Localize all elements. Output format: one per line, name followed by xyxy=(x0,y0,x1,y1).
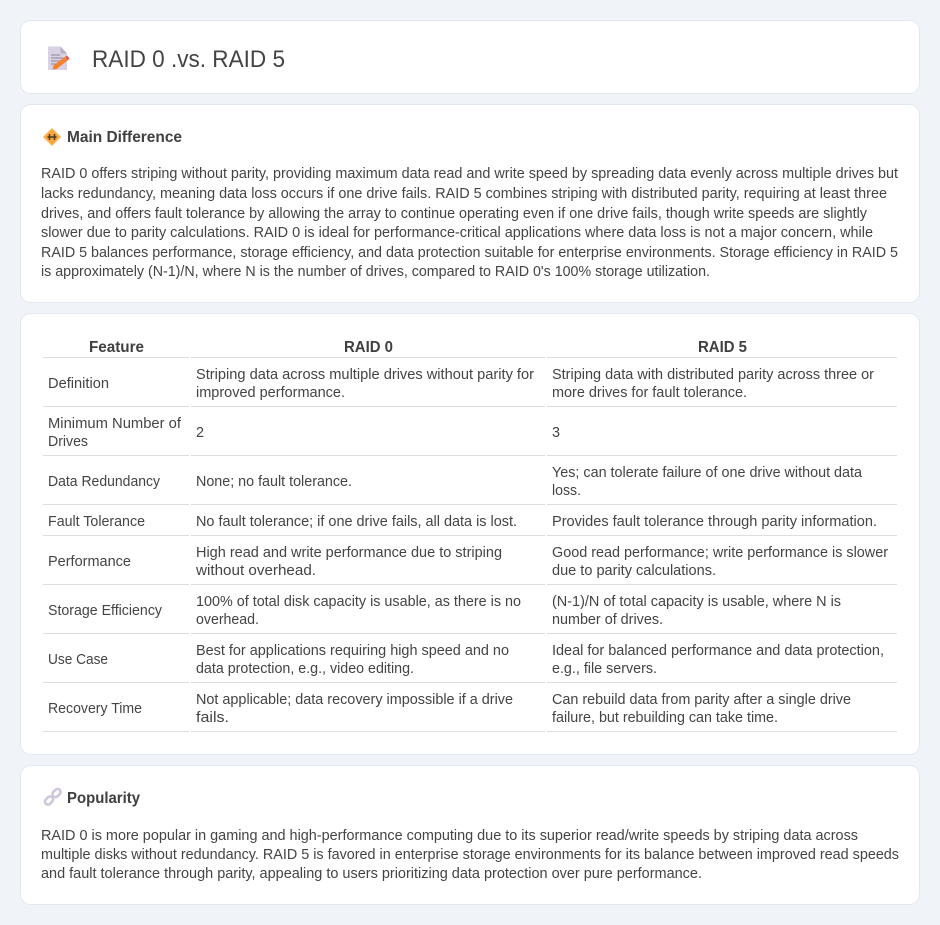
row: data redundancy xyxy=(48,465,862,499)
icon: chain link xyxy=(44,788,62,806)
row: use case: Ideal for balanced performance and data protection, xyxy=(552,643,884,659)
row: storage efficiency: overhead. xyxy=(196,612,259,628)
panel: main difference xyxy=(20,104,920,302)
row: use case xyxy=(48,643,884,677)
row: definition: Striping data across multiple drives without parity for xyxy=(196,367,534,383)
row: definition: Striping data with distributed parity across three or xyxy=(552,367,874,383)
row: fault tolerance: No fault tolerance; if one drive fails, all data is lost. xyxy=(196,514,517,530)
row: data redundancy: None; no fault tolerance. xyxy=(196,474,352,490)
text block: main difference paragraph: RAID 5 balances performance, storage efficiency, and data protection suitable for enterprise environments. Storage efficiency in RAID 5 xyxy=(41,245,898,261)
heading: main difference: Main Difference xyxy=(67,129,182,146)
heading: popularity: Popularity xyxy=(67,790,140,807)
row: recovery time: failure, but rebuilding can take time. xyxy=(552,710,778,726)
row: storage efficiency xyxy=(48,594,841,628)
text block: popularity paragraph: multiple disks without redundancy. RAID 5 is favored in enterprise storage environments for its balance between improved read speeds xyxy=(41,847,899,863)
row: minimum number of drives: Drives xyxy=(48,434,88,450)
row: definition: improved performance. xyxy=(196,385,345,401)
text block: main difference paragraph: slower due to parity calculations. RAID 0 is ideal for performance-critical applications where data loss is not a major concern, while xyxy=(41,225,873,241)
text block: main difference paragraph xyxy=(41,166,898,280)
row: performance xyxy=(48,545,888,579)
row: recovery time: fails. xyxy=(196,710,229,726)
row: recovery time xyxy=(48,692,851,726)
text block: popularity paragraph xyxy=(41,828,899,882)
row: storage efficiency: Storage Efficiency xyxy=(48,603,163,619)
table header row: RAID 5 xyxy=(698,339,747,356)
text block: popularity paragraph: and fault tolerance through parity, appealing to users prioritizing data protection over pure performance. xyxy=(41,866,702,882)
row: performance: due to parity calculations. xyxy=(552,563,716,579)
row: data redundancy: loss. xyxy=(552,483,581,499)
row: minimum number of drives: 2 xyxy=(196,425,204,441)
row: recovery time: Not applicable; data recovery impossible if a drive xyxy=(196,692,513,708)
row: storage efficiency: (N-1)/N of total capacity is usable, where N is xyxy=(552,594,841,610)
row: performance: High read and write performance due to striping xyxy=(196,545,502,561)
icon: document with pencil xyxy=(48,46,70,70)
table header row xyxy=(89,339,747,356)
text block: popularity paragraph: RAID 0 is more popular in gaming and high-performance computing due to its superior read/write speeds by striping data across xyxy=(41,828,858,844)
icon: warning diamond xyxy=(44,128,60,146)
row: recovery time: Can rebuild data from parity after a single drive xyxy=(552,692,851,708)
text block: main difference paragraph: drives, and offers fault tolerance by allowing the array to continue operating even if one drive fails, though write speeds are slightly xyxy=(41,206,868,222)
row: definition xyxy=(48,367,874,401)
row: storage efficiency: number of drives. xyxy=(552,612,663,628)
row: performance: Performance xyxy=(48,554,131,570)
row: fault tolerance: Provides fault tolerance through parity information. xyxy=(552,514,877,530)
panel: title header xyxy=(20,20,920,94)
row: minimum number of drives: 3 xyxy=(552,425,560,441)
row: fault tolerance xyxy=(48,514,877,530)
row: performance: Good read performance; write performance is slower xyxy=(552,545,888,561)
table header row: Feature xyxy=(89,339,144,356)
text block: main difference paragraph: RAID 0 offers striping without parity, providing maximum data read and write speed by spreading data evenly across multiple drives but xyxy=(41,166,898,182)
row: definition: Definition xyxy=(48,376,109,392)
row: definition: more drives for fault tolerance. xyxy=(552,385,747,401)
row: fault tolerance: Fault Tolerance xyxy=(48,514,145,530)
row: data redundancy: Yes; can tolerate failure of one drive without data xyxy=(552,465,862,481)
row: use case: data protection, e.g., video editing. xyxy=(196,661,414,677)
table header row: RAID 0 xyxy=(344,339,393,356)
row: minimum number of drives xyxy=(48,416,560,450)
row: use case: Use Case xyxy=(48,652,108,668)
row: storage efficiency: 100% of total disk capacity is usable, as there is no xyxy=(196,594,521,610)
row: minimum number of drives: Minimum Number of xyxy=(48,416,182,432)
row: recovery time: Recovery Time xyxy=(48,701,142,717)
panel: comparison table xyxy=(20,314,920,754)
title: RAID 0 .vs. RAID 5 xyxy=(92,46,285,73)
text block: main difference paragraph: is approximately (N-1)/N, where N is the number of drives, compared to RAID 0's 100% storage utilization. xyxy=(41,264,710,280)
row: use case: Best for applications requiring high speed and no xyxy=(196,643,509,659)
text block: main difference paragraph: lacks redundancy, meaning data loss occurs if one drive fails. RAID 5 combines striping with distributed parity, requiring at least three xyxy=(41,186,887,202)
panel: popularity xyxy=(20,766,920,904)
row: data redundancy: Data Redundancy xyxy=(48,474,161,490)
row: performance: without overhead. xyxy=(195,563,316,579)
row: use case: e.g., file servers. xyxy=(552,661,657,677)
